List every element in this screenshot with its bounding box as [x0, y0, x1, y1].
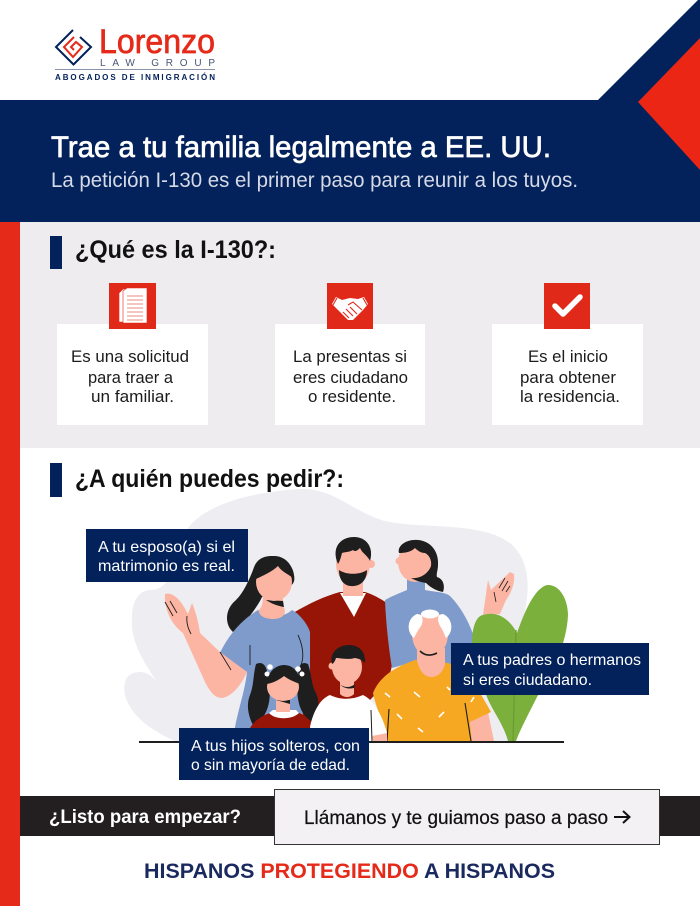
ground line: [139, 741, 564, 743]
left red side bar: [0, 222, 20, 906]
illustration: family: [124, 489, 568, 743]
title: Trae a tu familia legalmente a EE. UU.: [51, 131, 551, 164]
figure: man in red vest: [293, 537, 392, 741]
heading: what is the I-130: ¿Qué es la I-130?:: [75, 236, 276, 264]
figure: woman in blue, left: [165, 556, 310, 740]
panel: card solicitud: Es una solicitud: [71, 347, 189, 366]
call to action band: [20, 790, 700, 844]
icon: check mark: [544, 283, 590, 329]
call to action band: ¿Listo para empezar?: [49, 807, 241, 828]
panel: card presentas: La presentas si: [293, 347, 407, 366]
panel: header banner: [0, 0, 700, 222]
icon: arrow: [614, 811, 630, 823]
panel: card presentas: [275, 283, 425, 425]
button: call us: [274, 790, 660, 844]
callout: hijos solteros: A tus hijos solteros, con: [191, 738, 360, 755]
subtitle: La petición I-130 es el primer paso para reunir a los tuyos.: [51, 169, 578, 192]
icon: document: [109, 283, 156, 329]
panel: card presentas: o residente.: [308, 387, 396, 406]
figure: woman in blue, right: [385, 540, 514, 670]
callout: hijos solteros: [179, 728, 369, 780]
icon: green plant: [472, 585, 568, 741]
panel: card presentas: eres ciudadano: [293, 368, 408, 387]
tagline: HISPANOS PROTEGIENDO A HISPANOS: [144, 860, 555, 883]
panel: card residencia: la residencia.: [520, 387, 620, 406]
panel: what is the I-130 background: [20, 222, 700, 448]
callout: esposo: matrimonio es real.: [98, 558, 235, 575]
panel: card solicitud: un familiar.: [91, 387, 174, 406]
panel: card residencia: para obtener: [520, 368, 616, 387]
callout: esposo: [86, 529, 248, 582]
figure: girl with pigtails: [248, 663, 318, 741]
callout: padres o hermanos: [451, 643, 649, 695]
logo: Lorenzo Law Group: Lorenzo: [99, 23, 215, 61]
icon: red diamond accent: [638, 38, 700, 170]
logo: Lorenzo Law Group: LAW GROUP: [100, 58, 215, 69]
panel: card residencia: [492, 283, 643, 425]
icon: logo mark: [56, 30, 91, 65]
figure: boy in white shirt: [310, 645, 387, 741]
callout: padres o hermanos: si eres ciudadano.: [463, 672, 592, 689]
logo: Lorenzo Law Group: [55, 23, 215, 82]
icon: handshake: [327, 283, 373, 329]
figure: grandfather in yellow: [373, 610, 494, 741]
panel: card residencia: Es el inicio: [528, 347, 608, 366]
callout: padres o hermanos: A tus padres o hermanos: [463, 652, 641, 669]
callout: esposo: A tu esposo(a) si el: [98, 539, 235, 556]
raised arm: [165, 594, 247, 698]
button: call us: Llámanos y te guiamos paso a paso: [304, 808, 608, 829]
background blob: [124, 489, 528, 741]
callout: hijos solteros: o sin mayoría de edad.: [191, 757, 350, 774]
panel: card solicitud: [57, 283, 208, 425]
panel: card solicitud: para traer a: [88, 368, 174, 387]
heading: who can you petition: ¿A quién puedes pedir?:: [75, 465, 344, 493]
logo: Lorenzo Law Group: ABOGADOS DE INMIGRACIÓN: [55, 73, 215, 82]
